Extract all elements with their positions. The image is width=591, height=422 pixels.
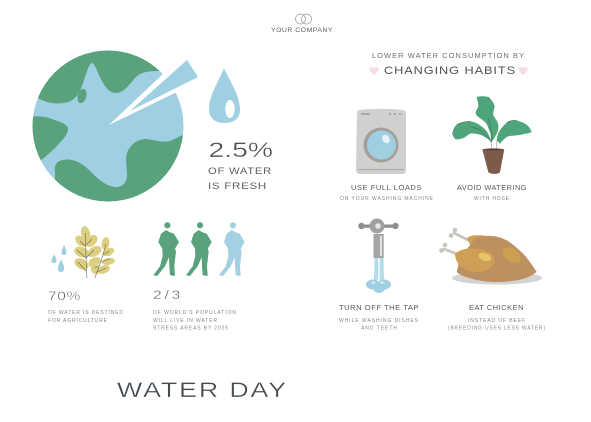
caption: world population: STRESS AREAS BY 2025 [153, 326, 228, 332]
panel: fresh water share [32, 50, 272, 202]
caption: destined for agriculture: FOR AGRICULTURE [48, 318, 108, 324]
caption: of water is fresh: IS FRESH [208, 181, 267, 192]
blue wedge [130, 60, 198, 111]
caption: of water is fresh: OF WATER [208, 166, 272, 177]
panel: use full loads [340, 109, 434, 202]
sublabel: with hose: WITH HOSE [474, 196, 510, 202]
sublabel: washing dishes: WHILE WASHING DISHES [339, 318, 419, 324]
label: avoid watering: AVOID WATERING [457, 185, 527, 192]
sublabel: instead of beef: (BREEDING USES LESS WATER) [448, 326, 545, 332]
heading: changing habits [370, 53, 528, 77]
figure 3 [219, 222, 245, 276]
icon: running tap [358, 218, 399, 293]
sublabel: washing dishes: AND TEETH [361, 326, 397, 332]
icon: water drop [209, 68, 240, 123]
sublabel: washing machine: ON YOUR WASHING MACHINE [340, 196, 434, 202]
icon: washing machine [356, 109, 406, 174]
white wedge cut [109, 55, 200, 125]
label: turn off the tap: TURN OFF THE TAP [339, 305, 419, 312]
label: eat chicken: EAT CHICKEN [469, 305, 524, 312]
infographic canvas [32, 14, 545, 397]
caption: destined for agriculture [48, 310, 123, 324]
icon: potted plant [452, 96, 532, 174]
heading line 1: LOWER WATER CONSUMPTION BY [372, 53, 525, 60]
caption: destined for agriculture: OF WATER IS DESTINED [48, 310, 123, 316]
sublabel: washing dishes [339, 318, 419, 332]
panel: avoid watering [452, 96, 532, 202]
icon: interlocking rings [296, 14, 312, 24]
panel: eat chicken [439, 228, 545, 332]
icon: left heart [370, 67, 378, 75]
caption: world population: WILL LIVE IN WATER [153, 318, 217, 324]
icon: three human figures [153, 222, 245, 276]
sublabel: instead of beef [448, 318, 545, 332]
sublabel: instead of beef: INSTEAD OF BEEF [468, 318, 525, 324]
panel: turn off the tap [339, 218, 419, 332]
caption: world population: OF WORLD'S POPULATION [153, 310, 236, 316]
icon: right heart [518, 67, 528, 75]
globe chart [32, 50, 198, 202]
company name: YOUR COMPANY [271, 27, 333, 34]
stat: 2/3: 2/3 [153, 290, 183, 302]
panel: population [153, 222, 245, 332]
icon: small drops [52, 245, 66, 272]
caption: of water is fresh [208, 166, 272, 192]
title: WATER DAY [117, 378, 288, 402]
stat: 2.5%: 2.5% [208, 139, 273, 162]
figure 1 [153, 222, 179, 276]
icon: leafy branches [73, 225, 116, 278]
drop highlight [225, 100, 235, 118]
heading line 2: CHANGING HABITS [384, 65, 516, 77]
company logo [271, 14, 333, 34]
stat: 70%: 70% [48, 291, 81, 303]
icon: roast chicken [439, 228, 542, 284]
panel: agriculture [48, 225, 123, 324]
figure 2 [186, 222, 212, 276]
label: use full loads: USE FULL LOADS [351, 185, 422, 192]
caption: world population [153, 310, 236, 332]
